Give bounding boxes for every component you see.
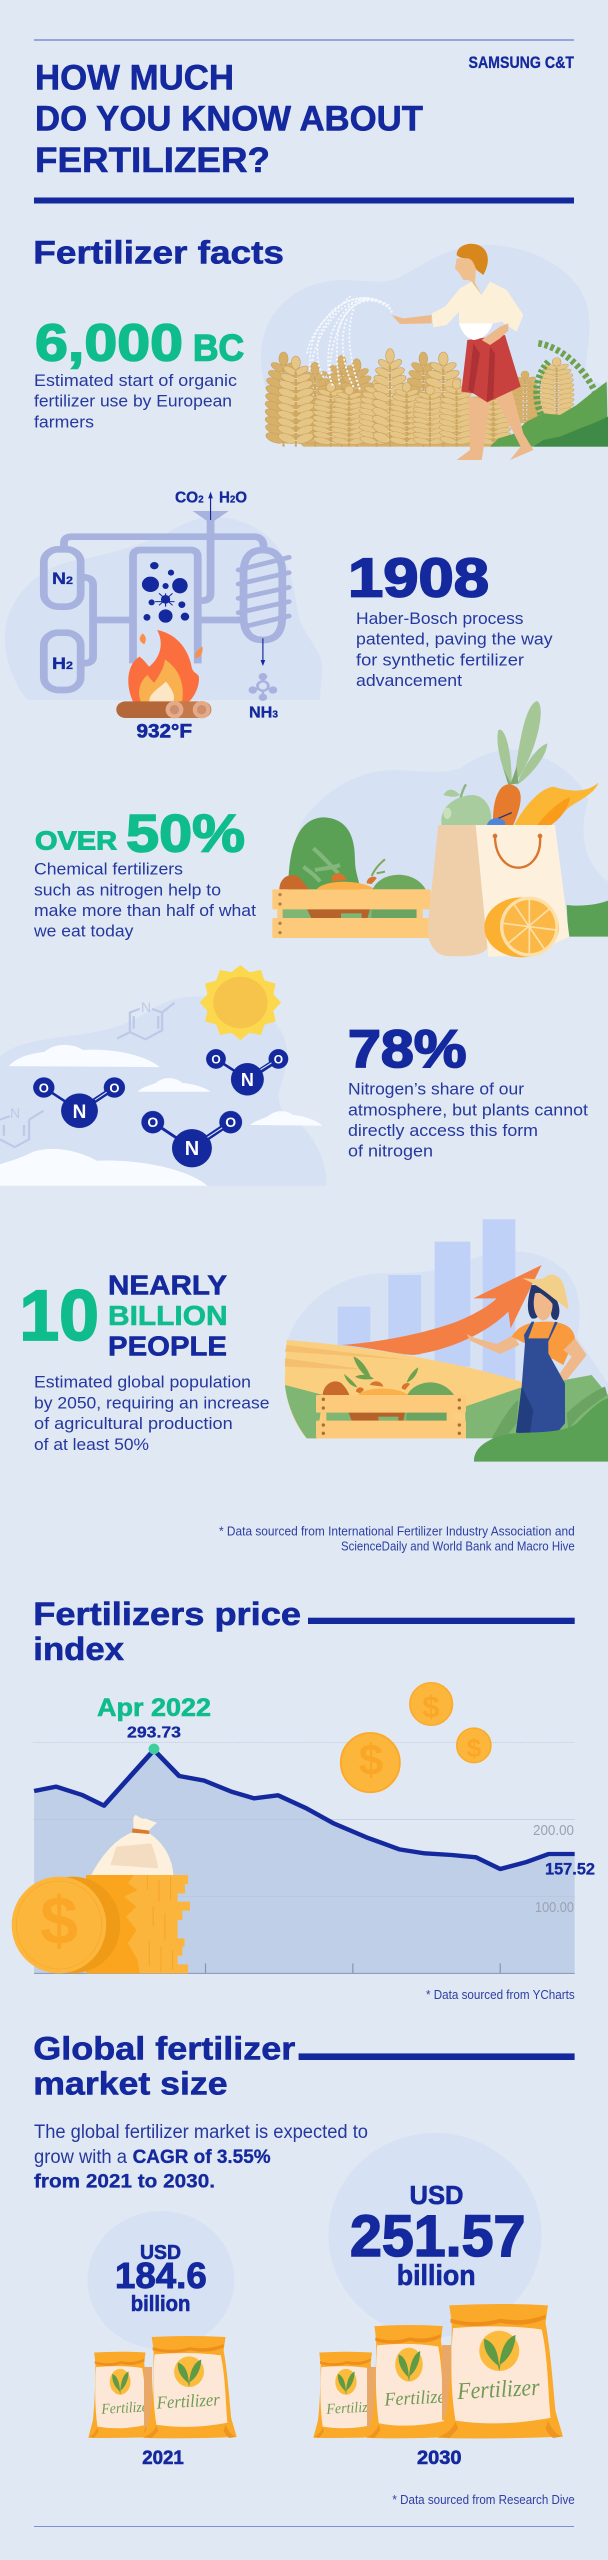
text: population fact: of agricultural production [34,1414,233,1433]
title: DO YOU KNOW ABOUT [35,100,423,139]
text: Haber-Bosch fact: for synthetic fertilizer [356,650,524,669]
text: CAGR statement: from 2021 to 2030. [34,2172,215,2193]
end value label: 157.52 [545,1860,595,1879]
text: CAGR statement: grow with a [34,2147,127,2168]
source note: fertilizer facts: * Data sourced from International Fertilizer Industry Association and [219,1525,575,1539]
source note: YCharts: * Data sourced from YCharts [426,1988,575,2002]
text: CAGR statement: The global fertilizer market is expected to [34,2122,368,2143]
title: FERTILIZER? [35,141,270,180]
title [35,58,423,180]
text: Haber-Bosch fact: advancement [356,671,462,690]
peak label: 293.73 [127,1725,181,1742]
panel: 2021 market size: billion [131,2291,190,2316]
big coin [26,1877,120,1973]
text: CAGR statement [34,2122,368,2193]
text: organic fertilizer fact: farmers [34,412,94,431]
axis labels: 200.00 [533,1822,574,1839]
sack [91,1815,173,1875]
panel: 2021 market size: USD [140,2242,181,2264]
top rule [34,40,574,41]
text: nitrogen share fact: directly access this form [348,1121,538,1140]
logs [116,701,211,718]
text: Haber-Bosch fact: Haber-Bosch process [356,609,524,628]
stat: 6,000 BC [35,315,244,373]
heading: fertilizers price index: Fertilizers price [33,1596,301,1632]
coin dollar signs: $ [40,1883,78,1959]
coin dollar signs: $ [422,1689,440,1724]
molecule letters: N [185,1138,199,1160]
panel: 2030 market size: Fertilizer [456,2375,541,2405]
text: nitrogen share fact [348,1080,588,1161]
panel: 2021 market size: 184.6 [115,2255,207,2296]
illustration: Haber-Bosch process diagram: 932°F [136,722,192,743]
text: nitrogen share fact: of nitrogen [348,1142,433,1161]
stat: nearly 10 billion people: PEOPLE [108,1331,227,1362]
heading: fertilizers price index [33,1596,575,1667]
peak label: Apr 2022 [97,1694,211,1722]
peak label [97,1694,211,1742]
panel: 2030 market size: 2030 [417,2448,462,2469]
text: Haber-Bosch fact: patented, paving the way [356,630,553,649]
stat: over 50%: OVER [35,825,117,855]
illustration: farmer sowing wheat [261,244,608,460]
coin dollar signs: $ [359,1736,383,1785]
illustration: Haber-Bosch process diagram: H2O [219,490,247,507]
panel: 2030 market size: Fertilize [325,2399,375,2418]
stat: over 50%: 50% [126,805,245,864]
illustration: farmer woman with growth chart [285,1219,608,1462]
molecule letters: O [274,1052,283,1066]
illustration: nitrogen molecules in the sky [0,965,327,1186]
coin dollar signs [40,1689,482,1959]
illustration: nitrogen molecules in the sky: N [10,1105,20,1121]
text: chemical fertilizers fact: Chemical fertilizers [34,860,183,879]
molecule letters: O [109,1080,119,1096]
text: Haber-Bosch fact [356,609,553,690]
text: population fact [34,1373,270,1454]
panel: 2021 market size: Fertilize [100,2399,149,2418]
panel: 2021 market size: Fertilizer [155,2389,221,2413]
coin stack [86,1875,190,1973]
illustration: crate and grocery bag [272,701,608,957]
stat: over 50% [35,805,245,864]
molecule letters: N [73,1102,86,1123]
heading: fertilizers price index: index [33,1631,124,1667]
heading: global fertilizer market size: market size [33,2065,228,2101]
coin dollar signs: $ [467,1733,482,1763]
heading: fertilizer facts: Fertilizer facts [33,234,284,270]
axis labels [533,1822,574,1916]
text: chemical fertilizers fact: make more than half of what [34,901,256,920]
text: population fact: Estimated global population [34,1373,251,1392]
fire [128,630,203,705]
clouds [0,1045,323,1186]
wooden crate [272,889,431,938]
panel: 2030 market size: USD [410,2180,464,2210]
text: CAGR statement: CAGR of 3.55% [133,2147,271,2168]
panel: 2030 market size: 251.57 [350,2204,525,2269]
paper bag [428,825,569,957]
illustration: Haber-Bosch process diagram: H2 [52,654,73,673]
illustration: Haber-Bosch process diagram [5,490,322,743]
molecule letters: N [241,1070,254,1090]
banana [513,783,598,828]
source note: fertilizer facts: ScienceDaily and World Bank and Macro Hive [341,1540,575,1554]
molecule letters: O [147,1114,158,1130]
illustration: Haber-Bosch process diagram: CO2 [175,490,204,507]
fields [285,1340,608,1438]
stat: nearly 10 billion people: BILLION [108,1300,228,1331]
stat: 6,000 BC: 6,000 [35,315,183,373]
orange arrow [342,1265,542,1355]
title: HOW MUCH [35,58,234,97]
stat: 6,000 BC: BC [193,328,244,369]
illustration: Haber-Bosch process diagram: N2 [52,569,73,588]
apple [441,784,491,826]
illustration: nitrogen molecules in the sky: N [141,999,151,1015]
axis labels: 100.00 [535,1899,574,1916]
carrot and leaves [493,701,547,828]
sun [200,965,281,1040]
N2O molecules [33,1049,288,1167]
heading: global fertilizer market size: Global fertilizer [33,2031,295,2067]
text: nitrogen share fact: Nitrogen’s share of our [348,1080,524,1099]
growth bars [338,1219,515,1379]
molecule letters: O [39,1080,49,1096]
panel: 2030 market size [313,2133,563,2469]
illustration: Haber-Bosch process diagram: NH3 [249,704,278,721]
chart: price index line chart [12,1683,595,1973]
panel: 2021 market size: 2021 [142,2448,184,2469]
area under line [34,1750,575,1973]
faded molecules [0,1003,174,1147]
stat: nearly 10 billion people: 10 [19,1277,99,1356]
floating coins [341,1683,491,1792]
panel: 2030 market size: billion [397,2260,476,2292]
heading: global fertilizer market size [33,2031,575,2101]
bottom rule [34,2526,574,2527]
orange [484,897,559,957]
stat: 78%: 78% [348,1020,466,1079]
stat: nearly 10 billion people [19,1270,228,1362]
source note: Research Dive: * Data sourced from Research Dive [392,2493,575,2507]
text: chemical fertilizers fact: such as nitrogen help to [34,880,221,899]
stat: nearly 10 billion people: NEARLY [108,1270,227,1300]
panel: 2030 market size: Fertilize [383,2386,446,2411]
text: organic fertilizer fact [34,371,238,431]
molecule letters: O [225,1114,236,1130]
molecule letters [39,1052,283,1160]
molecule letters: O [211,1052,221,1066]
source note: fertilizer facts [219,1525,575,1554]
brand logo: Samsung C&T: SAMSUNG C&T [468,53,575,72]
text: population fact: of at least 50% [34,1435,149,1454]
text: organic fertilizer fact: fertilizer use by European [34,392,232,411]
stat: 1908: 1908 [348,547,489,609]
vegetables and crate [316,1357,466,1438]
text: population fact: by 2050, requiring an increase [34,1393,270,1412]
title rule [34,198,574,204]
farmer woman [467,1275,587,1435]
price line [34,1750,575,1869]
text: nitrogen share fact: atmosphere, but plants cannot [348,1100,588,1119]
text: chemical fertilizers fact [33,860,256,941]
text: organic fertilizer fact: Estimated start of organic [34,371,238,390]
farmer [392,244,533,460]
panel: 2021 market size [88,2211,237,2469]
text: chemical fertilizers fact: we eat today [33,922,134,941]
green hill [474,1398,608,1462]
